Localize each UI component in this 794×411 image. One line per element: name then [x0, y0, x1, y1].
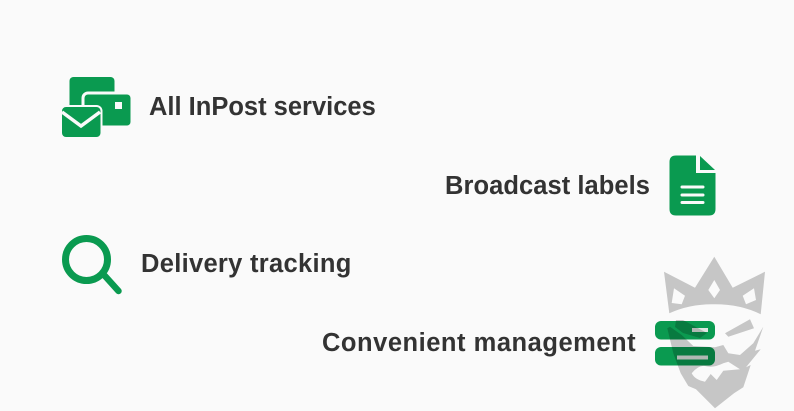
icon: wallet, card and envelope — [61, 77, 132, 138]
watermark: crowned lion — [664, 257, 765, 408]
heading: All InPost services: All InPost services — [149, 93, 376, 121]
heading: Broadcast labels: Broadcast labels — [445, 172, 650, 200]
heading: Convenient management: Convenient management — [322, 329, 636, 357]
icon: magnifying glass — [66, 238, 118, 291]
icon: server stack — [655, 321, 715, 366]
icon: document — [670, 156, 716, 216]
heading: Delivery tracking: Delivery tracking — [141, 250, 352, 278]
